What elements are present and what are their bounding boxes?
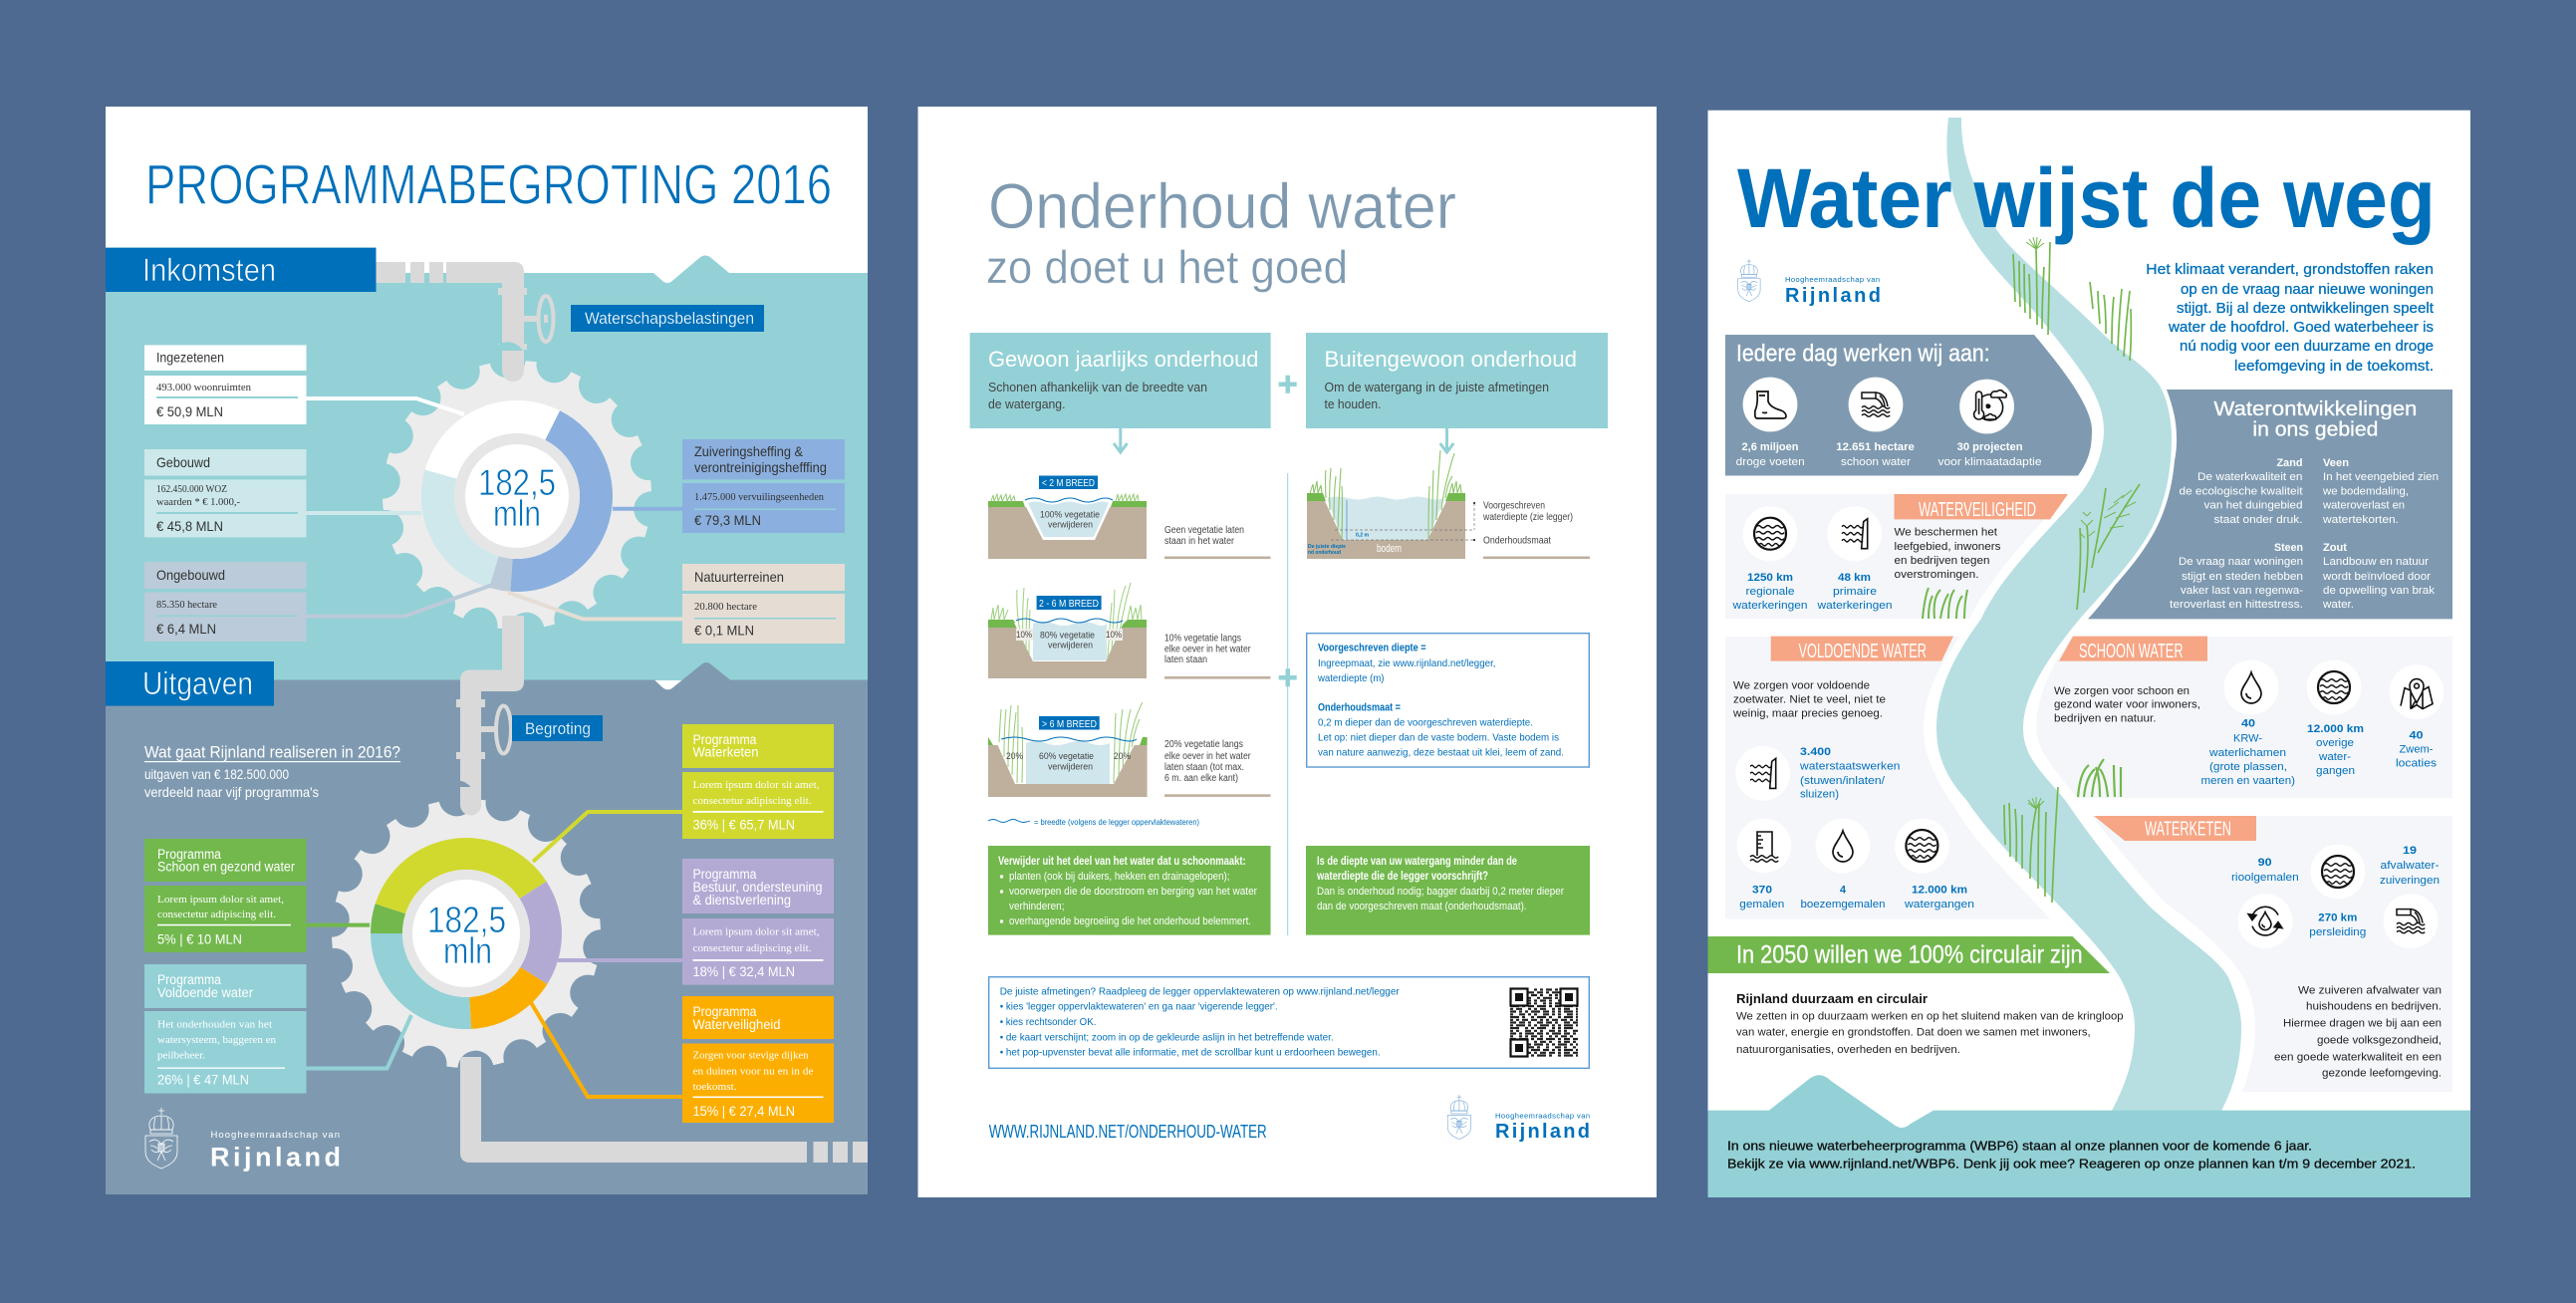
text: waterontwikkelingen: staat onder druk. <box>2213 514 2303 526</box>
box: Natuurterreinen: Natuurterreinen <box>694 569 784 585</box>
box: Zuiveringsheffing: € 79,3 MLN <box>694 512 761 528</box>
illustration: buitengewoon profile: De juiste diepte <box>1308 544 1346 550</box>
box: Bestuur: consectetur adipiscing elit. <box>693 943 811 954</box>
stats: waterkeringen: regionale <box>1745 586 1795 598</box>
text: waterontwikkelingen: Landbouw en natuur <box>2323 556 2429 568</box>
gear: expenses donut: mln <box>443 930 492 971</box>
text: waterketen: We zuiveren afvalwater van <box>2298 984 2442 996</box>
stat: droge voeten: droge voeten <box>1736 456 1805 468</box>
stats: gemalen: 4 <box>1840 884 1847 896</box>
stats: waterketen <box>2231 845 2440 948</box>
text: bottom call to action: Bekijk ze via www.rijnland.net/WBP6. Denk jij ook mee? Reageren op onze plannen kan t/m 9 december 2021. <box>1727 1156 2416 1172</box>
title: Onderhoud water <box>986 170 1456 293</box>
pipe: expenses exit <box>460 1051 868 1163</box>
box: Gewoon jaarlijks onderhoud: de watergang. <box>988 397 1066 411</box>
pipe: income to gear <box>376 262 554 382</box>
gear: income donut: mln <box>493 493 541 534</box>
stat: waterstaatswerken: 3.400 <box>1800 746 1831 758</box>
box: Ingezetenen: Ingezetenen <box>156 349 224 365</box>
text: intro expenses: Wat gaat Rijnland realiseren in 2016? <box>144 743 400 762</box>
text: waterketen <box>2274 984 2442 1080</box>
box: Bestuur: Lorem ipsum dolor sit amet, <box>693 927 819 938</box>
text: intro: water de hoofdrol. Goed waterbeheer is <box>2168 320 2434 336</box>
box: juiste afmetingen: • kies rechtsonder OK. <box>1000 1016 1096 1028</box>
text: waterontwikkelingen: vaker last van regenwa- <box>2181 585 2303 597</box>
title: Onderhoud water: Onderhoud water <box>988 170 1456 242</box>
banner: voldoende water: VOLDOENDE WATER <box>1799 641 1927 662</box>
text: waterontwikkelingen: wordt beïnvloed door <box>2322 571 2431 583</box>
panel: waterketen shape <box>2092 816 2452 1092</box>
text: duurzaam en circulair: Rijnland duurzaam en circulair <box>1736 991 1928 1006</box>
box: Gebouwd: € 45,8 MLN <box>156 518 223 534</box>
illustration: 2 to 6 m <box>988 583 1147 678</box>
text: waterontwikkelingen: de ecologische kwaliteit <box>2180 485 2303 497</box>
illustration: over 6 m <box>988 702 1148 797</box>
illustration: buitengewoon profile: 0,2 m <box>1356 533 1369 539</box>
label: Waterschapsbelastingen: Waterschapsbelastingen <box>585 309 754 328</box>
stat: droge voeten <box>1736 378 1805 468</box>
text: waterontwikkelingen <box>2170 398 2439 611</box>
stats: schoon water: locaties <box>2396 758 2438 770</box>
logo: Rijnland: Hoogheemraadschap van <box>1785 275 1880 284</box>
text: waterketen: goede volksgezondheid, <box>2317 1034 2442 1046</box>
text: 10% vegetatie <box>1164 634 1271 679</box>
box: juiste afmetingen: • het pop-upvenster bevat alle informatie, met de scrollbar kunt u erdoorheen bewegen. <box>1000 1047 1381 1059</box>
text: waterontwikkelingen: watertekorten. <box>2322 514 2399 526</box>
text: schoon water: gezond water voor inwoners, <box>2054 699 2200 711</box>
text: duurzaam en circulair: We zetten in op duurzaam werken en op het sluitend maken van de kringloop <box>1736 1011 2124 1023</box>
illustration: under 2 m: 100% vegetatie <box>1040 510 1100 521</box>
title: Water wijst de weg: Water wijst de weg <box>1737 151 2436 245</box>
box: Waterveiligheid: Waterveiligheid <box>693 1017 781 1032</box>
logo: Rijnland blue: Hoogheemraadschap van <box>1495 1112 1590 1120</box>
box: Voldoende water: 26% | € 47 MLN <box>157 1072 249 1088</box>
box: verwijder: voorwerpen die de doorstroom en berging van het water <box>1009 886 1257 898</box>
text: geen vegetatie <box>1164 525 1271 559</box>
box: Bestuur: 18% | € 32,4 MLN <box>693 963 795 979</box>
text: intro <box>2146 262 2434 375</box>
stats: waterketen: 90 <box>2258 857 2272 869</box>
box: Waterveiligheid: Programma <box>693 1004 757 1019</box>
panel: voldoende water shape <box>1725 637 2050 918</box>
illustration: 2 to 6 m: verwijderen <box>1048 641 1093 652</box>
panel: waterveiligheid shape <box>1725 494 2068 619</box>
box: Ongebouwd: € 6,4 MLN <box>156 621 216 637</box>
box: Schoon en gezond water: Schoon en gezond water <box>157 859 295 875</box>
stat: waterstaatswerken: sluizen) <box>1800 789 1839 801</box>
box: Waterveiligheid: 15% | € 27,4 MLN <box>693 1103 795 1119</box>
box: Waterveiligheid: en duinen voor nu en in de <box>693 1067 814 1078</box>
stat: waterstaatswerken: waterstaatswerken <box>1799 761 1901 773</box>
stats: waterketen: 270 km <box>2318 912 2358 924</box>
gear: income donut <box>363 341 671 655</box>
river <box>1936 118 2241 1111</box>
box: Buitengewoon onderhoud: Om de watergang in de juiste afmetingen <box>1325 381 1549 394</box>
text: intro expenses: uitgaven van € 182.500.000 <box>144 766 289 782</box>
box: Bestuur: Bestuur, ondersteuning <box>693 880 823 895</box>
box: juiste afmetingen: De juiste afmetingen? Raadpleeg de legger oppervlaktewateren op www.rijnland.net/legger <box>1000 986 1400 998</box>
box: Bestuur <box>682 859 834 985</box>
box: Voldoende water: Voldoende water <box>157 985 253 1000</box>
banner: schoon water: SCHOON WATER <box>2079 641 2184 662</box>
box: voorgeschreven diepte: van nature aanwezig, deze bestaat uit klei, leem of zand. <box>1318 747 1564 759</box>
box: Zuiveringsheffing <box>682 439 845 533</box>
stat: waterstaatswerken: (stuwen/inlaten/ <box>1800 775 1886 787</box>
divider with plus <box>1279 473 1297 935</box>
stats: waterkeringen: waterkeringen <box>1731 600 1807 612</box>
heading: Inkomsten: Inkomsten <box>142 252 276 288</box>
stats: waterkeringen: 1250 km <box>1747 572 1793 584</box>
legend: breedte: = breedte (volgens de legger oppervlaktewateren) <box>1034 817 1199 827</box>
stat: klimaatadaptie: 30 projecten <box>1957 441 2023 453</box>
stats: waterkeringen <box>1731 506 1893 612</box>
box: Zuiveringsheffing: 1.475.000 vervuilingseenheden <box>694 492 825 503</box>
stats: waterketen: afvalwater- <box>2381 860 2440 872</box>
label: Begroting <box>512 715 603 741</box>
box: Voldoende water <box>144 964 307 1094</box>
box: juiste afmetingen: • kies 'legger oppervlaktewateren' en ga naar 'vigerende legger'. <box>1000 1001 1278 1013</box>
box: Waterveiligheid <box>682 996 834 1123</box>
text: geen vegetatie: Geen vegetatie laten <box>1164 525 1244 536</box>
box: Buitengewoon onderhoud: te houden. <box>1325 397 1381 411</box>
box: Bestuur: Programma <box>693 867 757 882</box>
logo: Rijnland: Rijnland <box>1785 285 1881 307</box>
banner: voldoende water <box>1771 637 1953 662</box>
text: waterveiligheid: en bedrijven tegen <box>1895 555 1990 567</box>
box: voorgeschreven diepte: waterdiepte (m) <box>1317 672 1385 684</box>
text: voldoende water: We zorgen voor voldoende <box>1733 679 1870 691</box>
stats: schoon water: gangen <box>2316 765 2355 777</box>
box: voorgeschreven diepte: Onderhoudsmaat = <box>1318 702 1401 714</box>
box: voorgeschreven diepte: Ingreepmaat, zie www.rijnland.net/legger, <box>1318 657 1496 669</box>
stat: schoon water: schoon water <box>1841 456 1911 468</box>
text: duurzaam en circulair: natuurorganisaties, overheden en bedrijven. <box>1736 1044 1960 1056</box>
stats: gemalen: gemalen <box>1739 899 1784 911</box>
box: Schoon en gezond water: consectetur adipiscing elit. <box>157 910 276 920</box>
illustration: buitengewoon profile: nd onderhoud <box>1308 550 1341 556</box>
box: diepte: Dan is onderhoud nodig; bagger daarbij 0,2 meter dieper <box>1317 886 1564 898</box>
stats: schoon water: (grote plassen, <box>2209 761 2287 773</box>
text: duurzaam en circulair <box>1736 991 2124 1056</box>
stats: schoon water: KRW- <box>2233 733 2262 745</box>
text: waterontwikkelingen: stijgt en steden hebben <box>2182 571 2303 583</box>
banner: 2050 circulair: In 2050 willen we 100% circulair zijn <box>1736 940 2083 968</box>
text: waterontwikkelingen: Waterontwikkelingen <box>2213 398 2417 420</box>
stat: schoon water: 12.651 hectare <box>1836 441 1915 453</box>
stats: gemalen: watergangen <box>1904 899 1974 911</box>
box: voorgeschreven diepte: 0,2 m dieper dan de voorgeschreven waterdiepte. <box>1318 717 1533 729</box>
panel: waterontwikkelingen shape <box>2088 390 2452 619</box>
text: intro expenses: verdeeld naar vijf programma's <box>144 784 319 800</box>
text: intro: leefomgeving in de toekomst. <box>2234 359 2434 375</box>
heading: Inkomsten <box>106 248 377 292</box>
stats: waterketen: persleiding <box>2309 926 2366 938</box>
label: Begroting: Begroting <box>525 719 591 738</box>
text: waterontwikkelingen: Zout <box>2323 542 2347 554</box>
stats: schoon water <box>2201 660 2444 787</box>
illustration: over 6 m: 20% <box>1114 751 1131 762</box>
box: Ingezetenen: € 50,9 MLN <box>156 403 223 419</box>
panel: schoon water shape <box>2036 637 2452 798</box>
box: Voldoende water: Het onderhouden van het <box>157 1019 272 1030</box>
gear: income donut: 182,5 <box>478 462 556 503</box>
title: Onderhoud water: zo doet u het goed <box>986 241 1348 293</box>
text: waterketen: gezonde leefomgeving. <box>2322 1068 2442 1080</box>
text: onderhoudsmaat labels: Onderhoudsmaat <box>1483 536 1551 547</box>
box: Bestuur: & dienstverlening <box>693 893 791 908</box>
banner: waterketen <box>2094 816 2256 841</box>
text: 20% vegetatie: elke oever in het water <box>1164 751 1251 762</box>
illustration: 2 to 6 m: 10% <box>1016 630 1032 641</box>
box: Buitengewoon onderhoud: Buitengewoon onderhoud <box>1325 347 1577 372</box>
stat: klimaatadaptie: voor klimaatadaptie <box>1938 456 2042 468</box>
connectors: income <box>306 398 682 619</box>
text: 20% vegetatie: laten staan (tot max. <box>1164 762 1244 773</box>
box: voorgeschreven diepte: Voorgeschreven diepte = <box>1318 643 1426 654</box>
box: Voldoende water: Programma <box>157 972 221 987</box>
bottom band <box>1707 1075 2470 1197</box>
text: waterketen: huishoudens en bedrijven. <box>2306 1001 2442 1013</box>
text: schoon water: We zorgen voor schoon en <box>2054 685 2190 697</box>
box: Waterketen: Waterketen <box>693 745 759 760</box>
arrows: down from boxes <box>1114 428 1453 452</box>
box: Ongebouwd <box>144 562 307 642</box>
box: verwijder <box>988 846 1271 935</box>
heading: iedere dag: Iedere dag werken wij aan: <box>1736 341 1990 367</box>
box: voorgeschreven diepte <box>1307 634 1589 767</box>
illustration: 2 to 6 m: 80% vegetatie <box>1040 630 1095 641</box>
heading: Uitgaven <box>106 661 274 706</box>
box: Zuiveringsheffing: verontreinigingshefffing <box>694 459 827 475</box>
banner: schoon water <box>2059 637 2207 662</box>
gear: expenses donut <box>312 779 621 1088</box>
reeds <box>1923 237 2140 903</box>
box: Gewoon jaarlijks onderhoud: Gewoon jaarlijks onderhoud <box>988 347 1259 372</box>
text: waterveiligheid: We beschermen het <box>1895 526 1997 538</box>
text: intro expenses <box>144 743 400 800</box>
text: 20% vegetatie <box>1164 739 1271 797</box>
text: waterontwikkelingen: teroverlast en hittestress. <box>2170 599 2303 611</box>
text: waterveiligheid <box>1895 526 2001 581</box>
stats: schoon water: water- <box>2318 751 2351 763</box>
box: Waterketen: 36% | € 65,7 MLN <box>693 817 795 833</box>
stats: gemalen: boezemgemalen <box>1801 899 1885 911</box>
panel: Programmabegroting 2016 poster <box>106 107 868 1194</box>
text: intro: nú nodig voor een duurzame en droge <box>2180 339 2434 355</box>
box: diepte: dan de voorgeschreven maat (onderhoudsmaat). <box>1317 901 1526 912</box>
text: voldoende water: zoetwater. Niet te veel, niet te <box>1733 694 1886 706</box>
logo: Rijnland blue: Rijnland <box>1495 1121 1590 1143</box>
text: waterontwikkelingen: Zand <box>2277 457 2303 469</box>
text: 10% vegetatie: elke oever in het water <box>1164 645 1251 655</box>
stats: schoon water: Zwem- <box>2399 744 2434 756</box>
text: waterketen: Hiermee dragen we bij aan een <box>2283 1018 2442 1030</box>
text: onderhoudsmaat labels <box>1482 501 1590 559</box>
stats: gemalen: 12.000 km <box>1912 884 1967 896</box>
url: WWW.RIJNLAND.NET/ONDERHOUD-WATER <box>989 1122 1267 1142</box>
banner: 2050 circulair <box>1707 936 2110 973</box>
illustration: under 2 m <box>988 476 1147 559</box>
box: Buitengewoon onderhoud <box>1306 333 1608 428</box>
text: waterontwikkelingen: van het duingebied <box>2203 500 2303 512</box>
box: Waterveiligheid: Zorgen voor stevige dijken <box>693 1050 809 1062</box>
illustration: under 2 m: < 2 M BREED <box>1042 477 1095 489</box>
illustration: buitengewoon profile <box>1307 450 1475 559</box>
box: Schoon en gezond water: Programma <box>157 847 221 862</box>
box: Gebouwd <box>144 449 307 537</box>
stats: schoon water: 12.000 km <box>2307 723 2364 735</box>
text: waterontwikkelingen: Veen <box>2323 457 2349 469</box>
pipe: gear to expenses <box>456 638 524 838</box>
illustration: buitengewoon profile: bodem <box>1377 543 1402 555</box>
box: Gebouwd: waarden * € 1.000,- <box>156 497 240 508</box>
icon: plus <box>1279 376 1297 393</box>
text: waterontwikkelingen: Steen <box>2274 542 2303 554</box>
logo: Rijnland white: Rijnland <box>210 1143 341 1173</box>
text: waterketen: een goede waterkwaliteit en een <box>2274 1052 2442 1064</box>
box: Ongebouwd: Ongebouwd <box>156 567 225 583</box>
illustration: over 6 m: 60% vegetatie <box>1039 751 1094 762</box>
text: waterontwikkelingen: In het veengebied zien <box>2323 471 2439 483</box>
box: verwijder: Verwijder uit het deel van het water dat u schoonmaakt: <box>998 856 1246 868</box>
box: Ongebouwd: 85.350 hectare <box>156 600 217 611</box>
box: diepte: Is de diepte van uw watergang minder dan de <box>1317 856 1517 868</box>
text: waterontwikkelingen: wateroverlast en <box>2322 500 2405 512</box>
box: juiste afmetingen: • de kaart verschijnt; zoom in op de gekleurde aslijn in het betreffende water. <box>1000 1032 1334 1044</box>
box: Waterketen: consectetur adipiscing elit. <box>693 796 811 807</box>
panel: Onderhoud water poster <box>918 107 1657 1197</box>
logo: Rijnland white: Hoogheemraadschap van <box>211 1130 340 1141</box>
illustration: over 6 m: > 6 M BREED <box>1042 718 1097 730</box>
banner: waterveiligheid <box>1895 494 2068 521</box>
box: Gewoon jaarlijks onderhoud: Schonen afhankelijk van de breedte van <box>988 381 1207 394</box>
illustration: 2 to 6 m: 2 - 6 M BREED <box>1039 598 1099 610</box>
stats: schoon water: waterlichamen <box>2208 747 2286 759</box>
text: 20% vegetatie: 6 m. aan elke kant) <box>1164 773 1238 784</box>
panel: iedere dag shape <box>1725 335 2092 476</box>
illustration: over 6 m: verwijderen <box>1048 761 1093 773</box>
text: voldoende water <box>1732 679 1886 720</box>
box: Gewoon jaarlijks onderhoud <box>970 333 1271 428</box>
illustration: over 6 m: 20% <box>1006 751 1023 762</box>
text: 20% vegetatie: 20% vegetatie langs <box>1164 739 1243 750</box>
stats: schoon water: overige <box>2316 737 2354 749</box>
stats: schoon water: 40 <box>2409 729 2423 741</box>
box: Gebouwd: Gebouwd <box>156 454 210 470</box>
panel: Water wijst de weg poster <box>1707 111 2470 1197</box>
title: PROGRAMMABEGROTING 2016 <box>145 153 832 217</box>
box: verwijder: overhangende begroeiing die het onderhoud belemmert. <box>1009 915 1251 927</box>
text: waterontwikkelingen: water. <box>2322 599 2354 611</box>
text: 10% vegetatie: laten staan <box>1164 654 1207 665</box>
text: duurzaam en circulair: van water, energie en grondstoffen. Dat doen we samen met inwoners, <box>1736 1027 2091 1039</box>
stats: waterketen: zuiveringen <box>2380 875 2440 887</box>
box: Ingezetenen: 493.000 woonruimten <box>156 383 252 393</box>
illustration: 2 to 6 m: 10% <box>1106 630 1122 641</box>
stats: waterketen: 19 <box>2403 845 2417 857</box>
stats: schoon water: meren en vaarten) <box>2201 775 2295 787</box>
QR code <box>1510 988 1578 1056</box>
box: Zuiveringsheffing: Zuiveringsheffing & <box>694 443 804 459</box>
logo: Rijnland <box>1738 259 1881 307</box>
box: diepte <box>1306 846 1590 935</box>
stat: schoon water <box>1836 378 1915 468</box>
box: Gebouwd: 162.450.000 WOZ <box>156 484 227 495</box>
box: juiste afmetingen <box>989 977 1589 1068</box>
text: waterontwikkelingen: we bodemdaling, <box>2322 485 2409 497</box>
banner: waterketen: WATERKETEN <box>2145 819 2231 841</box>
box: voorgeschreven diepte: Let op: niet dieper dan de vaste bodem. Vaste bodem is <box>1318 732 1559 744</box>
heading: Uitgaven: Uitgaven <box>142 665 253 701</box>
stats: schoon water: 40 <box>2241 718 2255 730</box>
box: Natuurterreinen: 20.800 hectare <box>694 602 757 613</box>
illustration: under 2 m: verwijderen <box>1048 520 1093 531</box>
text: waterveiligheid: leefgebied, inwoners <box>1895 541 2001 553</box>
text: bottom call to action <box>1727 1139 2416 1172</box>
box: Natuurterreinen <box>682 564 845 644</box>
text: waterontwikkelingen: De vraag naar woningen <box>2179 556 2303 568</box>
text: intro: op en de vraag naar nieuwe woningen <box>2181 282 2434 298</box>
banner: waterveiligheid: WATERVEILIGHEID <box>1919 499 2036 521</box>
text: voldoende water: weinig, maar precies genoeg. <box>1732 708 1883 720</box>
text: schoon water: bedrijven en natuur. <box>2054 713 2156 725</box>
box: Ingezetenen <box>144 345 307 424</box>
stats: gemalen: 370 <box>1752 884 1772 896</box>
text: 10% vegetatie: 10% vegetatie langs <box>1164 634 1241 645</box>
box: verwijder: planten (ook bij duikers, hekken en drainagelopen); <box>1009 871 1229 883</box>
box: verwijder: verhinderen; <box>1009 901 1064 912</box>
text: waterontwikkelingen: in ons gebied <box>2252 418 2378 440</box>
box: Waterketen: Programma <box>693 732 757 747</box>
stats: waterkeringen: 48 km <box>1838 572 1871 584</box>
gear: expenses donut: 182,5 <box>427 900 506 940</box>
stats: waterkeringen: primaire <box>1833 586 1877 598</box>
box: Schoon en gezond water: 5% | € 10 MLN <box>157 930 242 946</box>
text: waterontwikkelingen: de opwelling van brak <box>2323 585 2436 597</box>
text: waterontwikkelingen: De waterkwaliteit en <box>2197 471 2303 483</box>
stat: droge voeten: 2,6 miljoen <box>1741 441 1799 453</box>
stats: waterketen: rioolgemalen <box>2231 872 2299 884</box>
label: Waterschapsbelastingen <box>571 305 764 332</box>
text: waterveiligheid: overstromingen. <box>1895 569 1978 581</box>
box: Voldoende water: watersysteem, baggeren en <box>157 1035 277 1046</box>
logo: Rijnland blue <box>1447 1095 1590 1143</box>
stat: klimaatadaptie <box>1938 380 2042 468</box>
stats: waterkeringen: waterkeringen <box>1816 600 1893 612</box>
connectors: expenses <box>306 812 682 1097</box>
text: onderhoudsmaat labels: waterdiepte (zie legger) <box>1482 512 1573 523</box>
box: diepte: waterdiepte die de legger voorschrijft? <box>1316 871 1488 883</box>
box: Schoon en gezond water <box>144 839 307 952</box>
text: schoon water <box>2054 685 2200 725</box>
box: Waterveiligheid: toekomst. <box>693 1082 737 1093</box>
box: Waterketen: Lorem ipsum dolor sit amet, <box>693 780 819 791</box>
box: Waterketen <box>682 724 834 839</box>
box: Natuurterreinen: € 0,1 MLN <box>694 622 754 638</box>
text: intro: stijgt. Bij al deze ontwikkelingen speelt <box>2177 301 2434 317</box>
logo: Rijnland white <box>145 1108 341 1173</box>
text: intro: Het klimaat verandert, grondstoffen raken <box>2146 262 2434 278</box>
stat: waterstaatswerken <box>1735 746 1901 801</box>
box: Voldoende water: peilbeheer. <box>157 1050 205 1062</box>
text: onderhoudsmaat labels: Voorgeschreven <box>1483 501 1545 512</box>
stats: gemalen <box>1737 819 1974 911</box>
text: bottom call to action: In ons nieuwe waterbeheerprogramma (WBP6) staan al onze plannen voor de komende 6 jaar. <box>1727 1139 2312 1154</box>
text: geen vegetatie: staan in het water <box>1164 536 1235 547</box>
box: Schoon en gezond water: Lorem ipsum dolor sit amet, <box>157 895 284 906</box>
